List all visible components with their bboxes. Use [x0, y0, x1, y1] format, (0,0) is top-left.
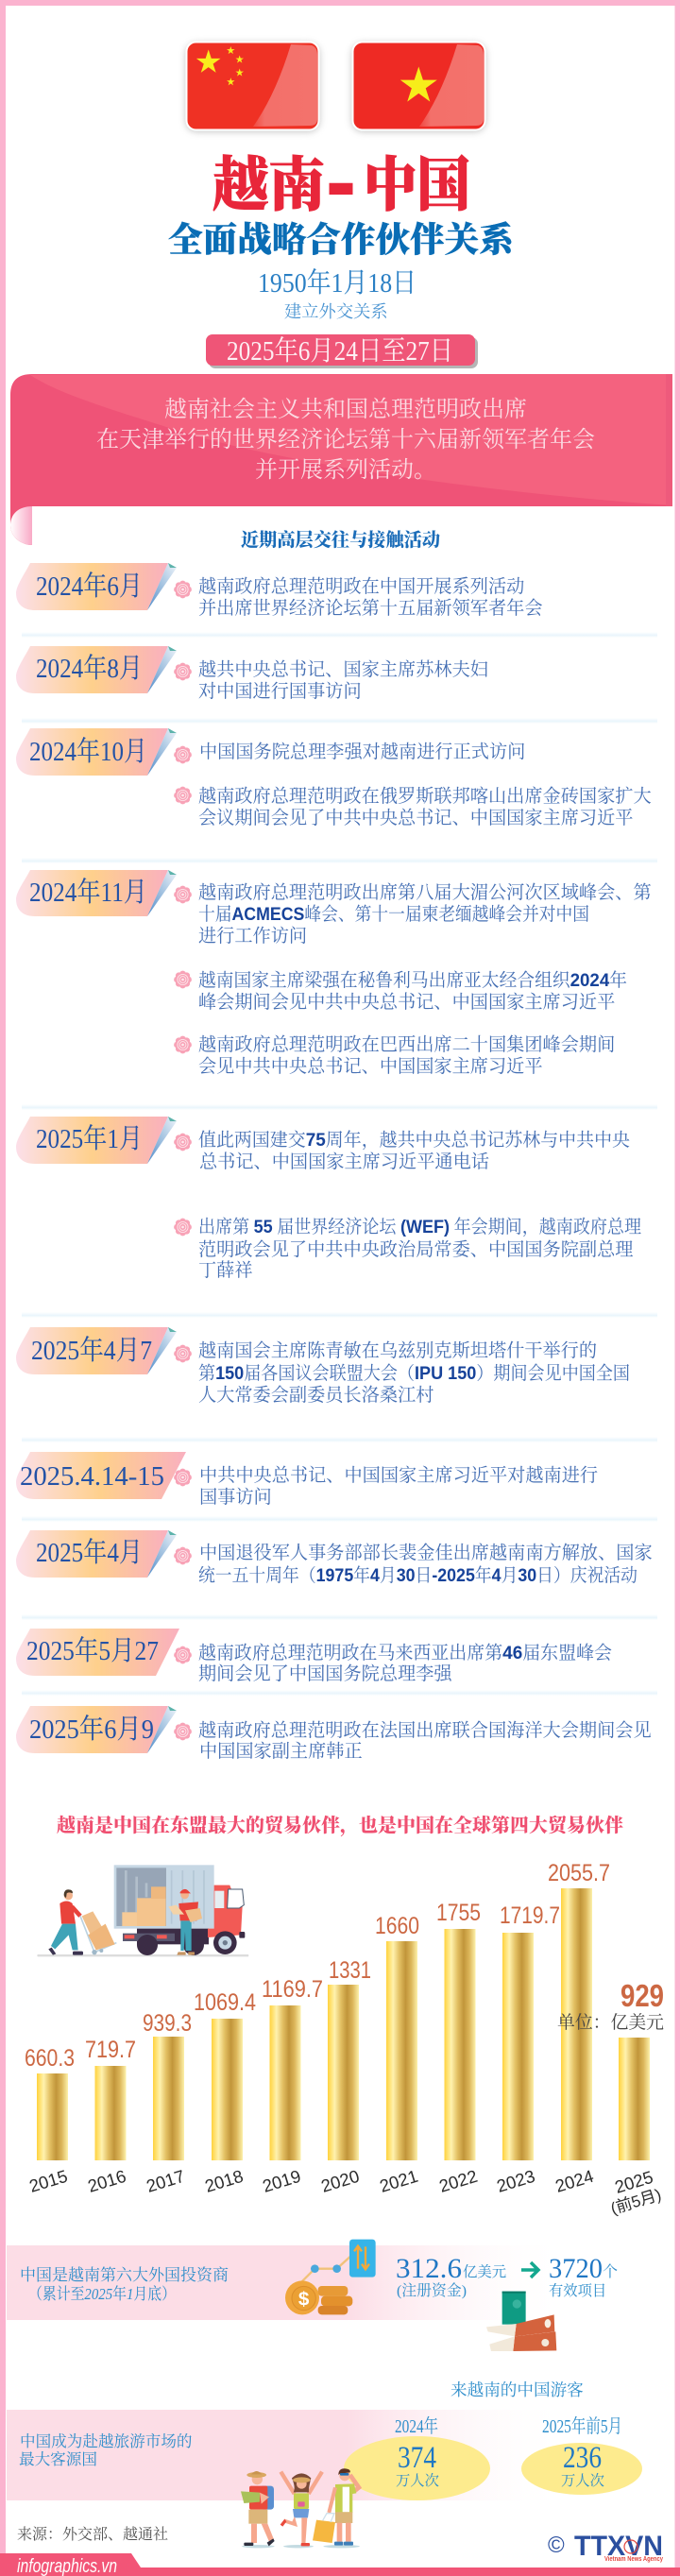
year axis labels: 2016 — [85, 2166, 128, 2196]
timeline row: 2025年1月: 2025年1月 — [36, 1123, 143, 1154]
timeline row: 2025.4.14-15: 中共中央总书记、中国国家主席习近平对越南进行 — [199, 1465, 598, 1486]
timeline row: 2025年4月: 统一五十周年（1975年4月30日-2025年4月30日）庆祝活动 — [198, 1565, 638, 1586]
year axis labels: 2025 — [612, 2167, 655, 2197]
icon: Vietnam flag — [352, 42, 485, 131]
logo: TTXVN: TTXVN — [574, 2531, 663, 2562]
investment description: 中国是越南第六大外国投资商 — [20, 2265, 229, 2284]
timeline row: 2024年6月: 2024年6月 — [36, 571, 143, 602]
timeline row: 2024年6月: 越南政府总理范明政在中国开展系列活动 — [198, 576, 524, 597]
timeline — [16, 563, 657, 1762]
value labels — [25, 1860, 664, 2072]
source: 来源：外交部、越通社 — [17, 2526, 168, 2543]
timeline row: 2025年4月: 中国退役军人事务部部长裴金佳出席越南南方解放、国家 — [199, 1543, 653, 1563]
title: – — [328, 115, 354, 245]
timeline row: 2025年1月: 范明政会见了中共中央政治局常委、中国国务院副总理 — [198, 1239, 633, 1260]
tourism description: 中国成为赴越旅游市场的 — [20, 2432, 193, 2450]
date pill: 2025年6月24日至27日 — [227, 335, 453, 367]
timeline row: 2025年1月: 出席第 55 届世界经济论坛 (WEF) 年会期间，越南政府总理 — [198, 1217, 641, 1237]
timeline row: 2024年6月: 并出席世界经济论坛第十五届新领军者年会 — [198, 598, 543, 619]
project count: 个 — [603, 2263, 618, 2280]
timeline row: 2024年10月: 中国国务院总理李强对越南进行正式访问 — [199, 742, 525, 762]
unit label: 单位：亿美元 — [557, 2012, 664, 2033]
timeline row: 2025年6月9 — [16, 1706, 652, 1762]
logo: TTXVN: © — [548, 2533, 565, 2558]
timeline row: 2025年4月: 2025年4月 — [36, 1537, 143, 1568]
icon: folders — [486, 2292, 556, 2351]
timeline row: 2024年11月: 进行工作访问 — [198, 926, 307, 947]
established caption: 建立外交关系 — [284, 302, 388, 321]
timeline row: 2024年10月: 会议期间会见了中共中央总书记、中国国家主席习近平 — [198, 808, 633, 828]
timeline row: 2025年1月: 丁薛祥 — [198, 1260, 253, 1281]
investment period: （累计至2025年1月底） — [28, 2284, 176, 2303]
timeline row: 2024年8月: 对中国进行国事访问 — [198, 681, 362, 702]
value labels: 1331 — [329, 1957, 371, 1984]
capital amount: 312.6 — [396, 2253, 462, 2284]
year axis labels: 2021 — [377, 2166, 420, 2196]
value labels: 929 — [620, 1978, 664, 2013]
timeline row: 2025年1月: 值此两国建交75周年，越共中央总书记苏林与中共中央 — [198, 1130, 630, 1151]
timeline row: 2025年1月 — [16, 1117, 641, 1281]
2025 stat: 万人次 — [561, 2473, 604, 2489]
project count — [549, 2253, 618, 2299]
title — [212, 115, 470, 245]
timeline row: 2025年6月9: 2025年6月9 — [29, 1714, 154, 1745]
panel: tourism — [7, 2410, 661, 2500]
year axis labels: 2018 — [202, 2166, 246, 2196]
value labels: 1069.4 — [194, 1989, 256, 2016]
value labels: 1719.7 — [500, 1902, 560, 1929]
timeline row: 2025年4月7: 第150届各国议会联盟大会（IPU 150）期间会见中国全国 — [198, 1363, 630, 1384]
year axis labels: 2022 — [436, 2166, 480, 2196]
bars — [37, 1888, 650, 2160]
year axis labels: 2015 — [26, 2166, 70, 2196]
2025 stat: 236 — [563, 2441, 602, 2475]
timeline row: 2025年4月7: 2025年4月7 — [31, 1335, 152, 1366]
timeline row: 2025年5月27: 期间会见了中国国务院总理李强 — [198, 1663, 452, 1684]
title: 越南 — [212, 153, 325, 218]
timeline row: 2024年11月: 2024年11月 — [29, 877, 147, 908]
timeline row: 2024年8月: 越共中央总书记、国家主席苏林夫妇 — [198, 659, 488, 680]
timeline row: 2024年10月: 越南政府总理范明政在俄罗斯联邦喀山出席金砖国家扩大 — [198, 786, 652, 807]
icon: China flag — [186, 42, 319, 131]
year axis labels: (前5月) — [608, 2186, 663, 2218]
timeline row: 2024年8月: 2024年8月 — [36, 653, 143, 684]
timeline row: 2024年10月: 2024年10月 — [29, 736, 147, 767]
timeline row: 2024年11月 — [16, 870, 652, 1077]
timeline row: 2024年11月: 越南政府总理范明政在巴西出席二十国集团峰会期间 — [198, 1034, 615, 1055]
project count: 有效项目 — [549, 2283, 606, 2299]
timeline row: 2025年1月: 总书记、中国国家主席习近平通电话 — [199, 1152, 489, 1172]
timeline row: 2024年11月: 越南政府总理范明政出席第八届大湄公河次区域峰会、第 — [198, 882, 652, 903]
year axis labels: 2023 — [494, 2166, 537, 2196]
subtitle: 全面战略合作伙伴关系 — [168, 220, 515, 259]
arrow — [521, 2262, 538, 2277]
timeline row: 2025年4月7: 越南国会主席陈青敏在乌兹别克斯坦塔什干举行的 — [198, 1340, 597, 1361]
timeline row: 2024年11月: 峰会期间会见中共中央总书记、中国国家主席习近平 — [198, 992, 615, 1013]
value labels: 1660 — [375, 1913, 419, 1939]
illustration: delivery truck — [37, 1865, 248, 1956]
2024 stat: 万人次 — [396, 2473, 439, 2489]
timeline row: 2025.4.14-15 — [16, 1452, 598, 1508]
2024 stat — [344, 2415, 490, 2500]
chart heading: 越南是中国在东盟最大的贸易伙伴，也是中国在全球第四大贸易伙伴 — [57, 1814, 623, 1836]
timeline row: 2024年8月 — [16, 646, 488, 702]
timeline row: 2025年5月27: 2025年5月27 — [26, 1635, 159, 1666]
2024 stat: 374 — [398, 2441, 436, 2475]
bar chart: bilateral trade — [25, 1860, 664, 2218]
flags — [186, 42, 485, 131]
illustration: tourists — [241, 2468, 360, 2548]
banner text — [96, 397, 595, 483]
timeline row: 2025.4.14-15: 2025.4.14-15 — [20, 1461, 164, 1492]
icon: coins and growth chart: $ — [298, 2288, 310, 2310]
year axis labels: 2019 — [260, 2166, 303, 2196]
capital amount: (注册资金) — [397, 2282, 467, 2299]
timeline row: 2025.4.14-15: 国事访问 — [199, 1487, 272, 1508]
year axis labels — [26, 2166, 663, 2218]
timeline row: 2024年11月: 会见中共中央总书记、中国国家主席习近平 — [198, 1056, 543, 1077]
timeline row: 2025年6月9: 越南政府总理范明政在法国出席联合国海洋大会期间会见 — [198, 1720, 652, 1741]
timeline row: 2024年11月: 越南国家主席梁强在秘鲁利马出席亚太经合组织2024年 — [198, 970, 627, 991]
2024 stat: 2024年 — [395, 2415, 438, 2437]
timeline row: 2024年6月 — [16, 563, 543, 619]
timeline row: 2025年4月 — [16, 1530, 653, 1586]
value labels: 2055.7 — [548, 1860, 610, 1886]
value labels: 939.3 — [143, 2010, 192, 2037]
capital amount: 亿美元 — [463, 2263, 506, 2280]
2025 stat: 2025年前5月 — [542, 2415, 622, 2437]
logo: TTXVN: Vietnam News Agency — [604, 2556, 663, 2563]
curl of banner — [10, 506, 32, 545]
year axis labels: 2020 — [318, 2166, 362, 2196]
timeline row: 2025年4月7: 人大常委会副委员长洛桑江村 — [198, 1385, 434, 1406]
banner text: 越南社会主义共和国总理范明政出席 — [164, 397, 527, 422]
timeline row: 2024年11月: 十届ACMECS峰会、第十一届柬老缅越峰会并对中国 — [198, 904, 589, 925]
timeline row: 2025年5月27: 越南政府总理范明政在马来西亚出席第46届东盟峰会 — [198, 1643, 612, 1663]
2025 stat — [521, 2415, 642, 2495]
footer bar — [0, 2553, 680, 2576]
year axis labels: 2017 — [144, 2166, 187, 2196]
title: 中国 — [364, 154, 470, 218]
timeline row: 2025年4月7 — [16, 1327, 630, 1406]
timeline row: 2025年5月27 — [16, 1629, 612, 1684]
value labels: 1169.7 — [262, 1976, 323, 2003]
heading: recent activities: 近期高层交往与接触活动 — [241, 529, 440, 551]
capital amount — [396, 2253, 506, 2299]
timeline row: 2025年6月9: 中国国家副主席韩正 — [199, 1741, 363, 1762]
tourists heading: 来越南的中国游客 — [450, 2380, 584, 2399]
panel: tourism: 最大客源国 — [19, 2450, 97, 2468]
timeline row: 2024年10月 — [16, 728, 652, 828]
banner text: 并开展系列活动。 — [255, 457, 436, 483]
year axis labels: 2024 — [552, 2166, 596, 2196]
panel: intro banner — [10, 374, 672, 545]
panel: investment — [7, 2240, 661, 2351]
icon: coins and growth chart — [285, 2240, 376, 2314]
value labels: 1755 — [436, 1900, 481, 1926]
date established: 1950年1月18日 — [258, 267, 416, 299]
project count: 3720 — [549, 2253, 603, 2284]
value labels: 719.7 — [85, 2037, 136, 2063]
banner text: 在天津举行的世界经济论坛第十六届新领军者年会 — [96, 427, 595, 452]
value labels: 660.3 — [25, 2045, 75, 2072]
